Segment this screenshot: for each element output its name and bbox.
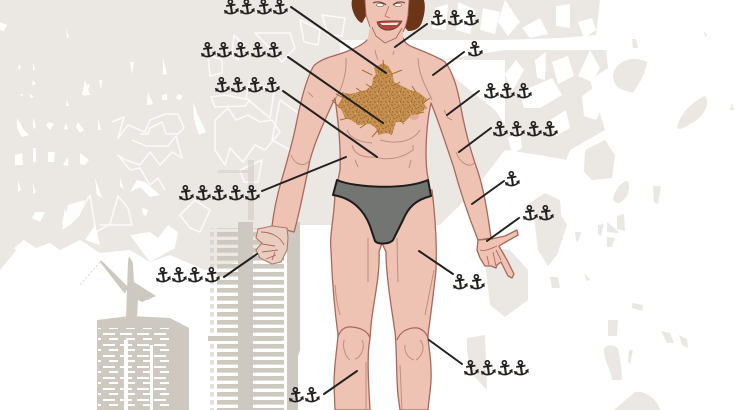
anchor label: waist: ⚓⚓⚓⚓⚓ (175, 180, 262, 206)
leader lines (224, 7, 519, 394)
anchor label: shin: ⚓⚓ (285, 382, 322, 408)
facial features (365, 0, 409, 43)
right hand (477, 230, 518, 278)
illustration: right tower (208, 160, 300, 410)
anchor label: elbow: ⚓⚓⚓⚓ (489, 116, 560, 142)
muscle lines (291, 42, 474, 410)
background outline flakes, left and center (80, 15, 345, 232)
anchor label: thigh: ⚓⚓ (449, 269, 487, 295)
anchor label: ribs left: ⚓⚓⚓⚓ (211, 72, 282, 98)
left hand (256, 226, 288, 264)
anchor label: forearm: ⚓ (501, 166, 522, 192)
briefs (333, 180, 431, 244)
chest hair (332, 60, 430, 137)
anchor label: neck: ⚓⚓⚓ (427, 5, 481, 31)
background fragments, upper right (432, 0, 604, 154)
anchor label: upper arm: ⚓⚓⚓ (480, 78, 534, 104)
background blobs, right side (467, 31, 734, 410)
anchor label: knee: ⚓⚓⚓⚓ (460, 355, 531, 381)
crane (126, 256, 150, 318)
legs (331, 190, 436, 410)
hand detail (261, 232, 501, 266)
anchor label: chest left: ⚓⚓⚓⚓⚓ (197, 37, 284, 63)
background flakes, left (0, 22, 206, 262)
illustration: left tower with crane (80, 256, 189, 410)
nipples (345, 111, 355, 119)
anchor label: left hand: ⚓⚓⚓⚓ (152, 262, 222, 288)
upper body and arms (272, 38, 491, 240)
anchor label: right hand: ⚓⚓ (519, 200, 556, 226)
face and neck (365, 0, 409, 52)
hair (352, 0, 425, 31)
figure: man in briefs (256, 0, 518, 410)
anchor label: shoulder: ⚓ (464, 36, 485, 62)
